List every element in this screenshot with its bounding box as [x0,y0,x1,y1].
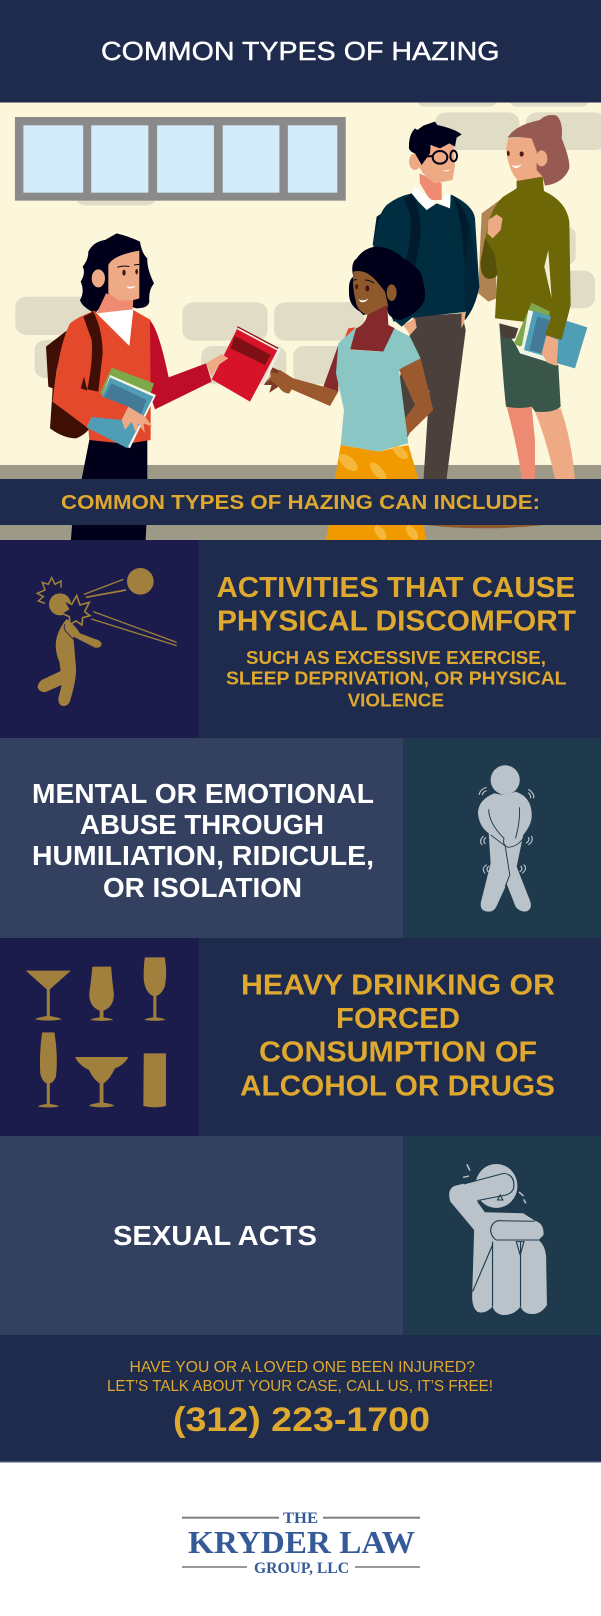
heading: CONSUMPTION OF [259,1037,537,1069]
heading [216,572,577,638]
heading [32,778,374,903]
person: woman with curly hair in teal top [263,247,433,483]
panel: physical discomfort [0,540,601,738]
call to action text: LET’S TALK ABOUT YOUR CASE, CALL US, IT’S FREE! [107,1378,493,1395]
heading: HUMILIATION, RIDICULE, [32,840,374,871]
phone number: (312) 223-1700 [173,1401,430,1439]
panel: heavy drinking [0,938,601,1136]
panel: mental or emotional abuse [0,738,601,938]
heading: HEAVY DRINKING OR [241,970,555,1002]
panel: sexual acts [0,1136,601,1335]
window [15,117,346,201]
heading: OR ISOLATION [103,872,302,903]
logo: The Kryder Law Group, LLC: THE [283,1510,318,1527]
footer call to action [0,1335,601,1462]
heading: ACTIVITIES THAT CAUSE [216,572,575,604]
lower garments below the band [71,524,544,542]
heading: PHYSICAL DISCOMFORT [217,606,577,638]
heading: ALCOHOL OR DRUGS [240,1071,555,1103]
icon: six drinking glasses [26,957,166,1107]
person: woman with backpack handing over red book [46,233,281,479]
person: man's trousers [393,313,466,479]
description: SLEEP DEPRIVATION, OR PHYSICAL [226,668,566,689]
description: SUCH AS EXCESSIVE EXERCISE, [246,647,546,668]
header banner [0,0,601,102]
subheading band [0,479,601,525]
person: man with glasses [373,122,479,335]
heading: SEXUAL ACTS [113,1220,317,1251]
description: VIOLENCE [348,690,444,711]
icon: person shaking, covering self [478,765,534,912]
description [226,647,566,711]
heading: FORCED [336,1003,460,1035]
logo: The Kryder Law Group, LLC: GROUP, LLC [254,1560,349,1577]
subheading band: COMMON TYPES OF HAZING CAN INCLUDE: [61,492,540,514]
icon: person being hit by ball [37,568,177,706]
call to action text [107,1359,493,1395]
logo: The Kryder Law Group, LLC [182,1510,420,1577]
red book [212,326,281,402]
heading: MENTAL OR EMOTIONAL [32,778,374,809]
icon: person curled up, head in arm [449,1164,547,1315]
heading: ABUSE THROUGH [80,809,324,840]
title: COMMON TYPES OF HAZING [101,36,499,66]
heading [240,970,555,1103]
logo: The Kryder Law Group, LLC: KRYDER LAW [188,1524,415,1560]
illustration: students in hallway [0,97,601,542]
call to action text: HAVE YOU OR A LOVED ONE BEEN INJURED? [130,1359,475,1376]
person: woman in olive sweater [478,115,587,479]
